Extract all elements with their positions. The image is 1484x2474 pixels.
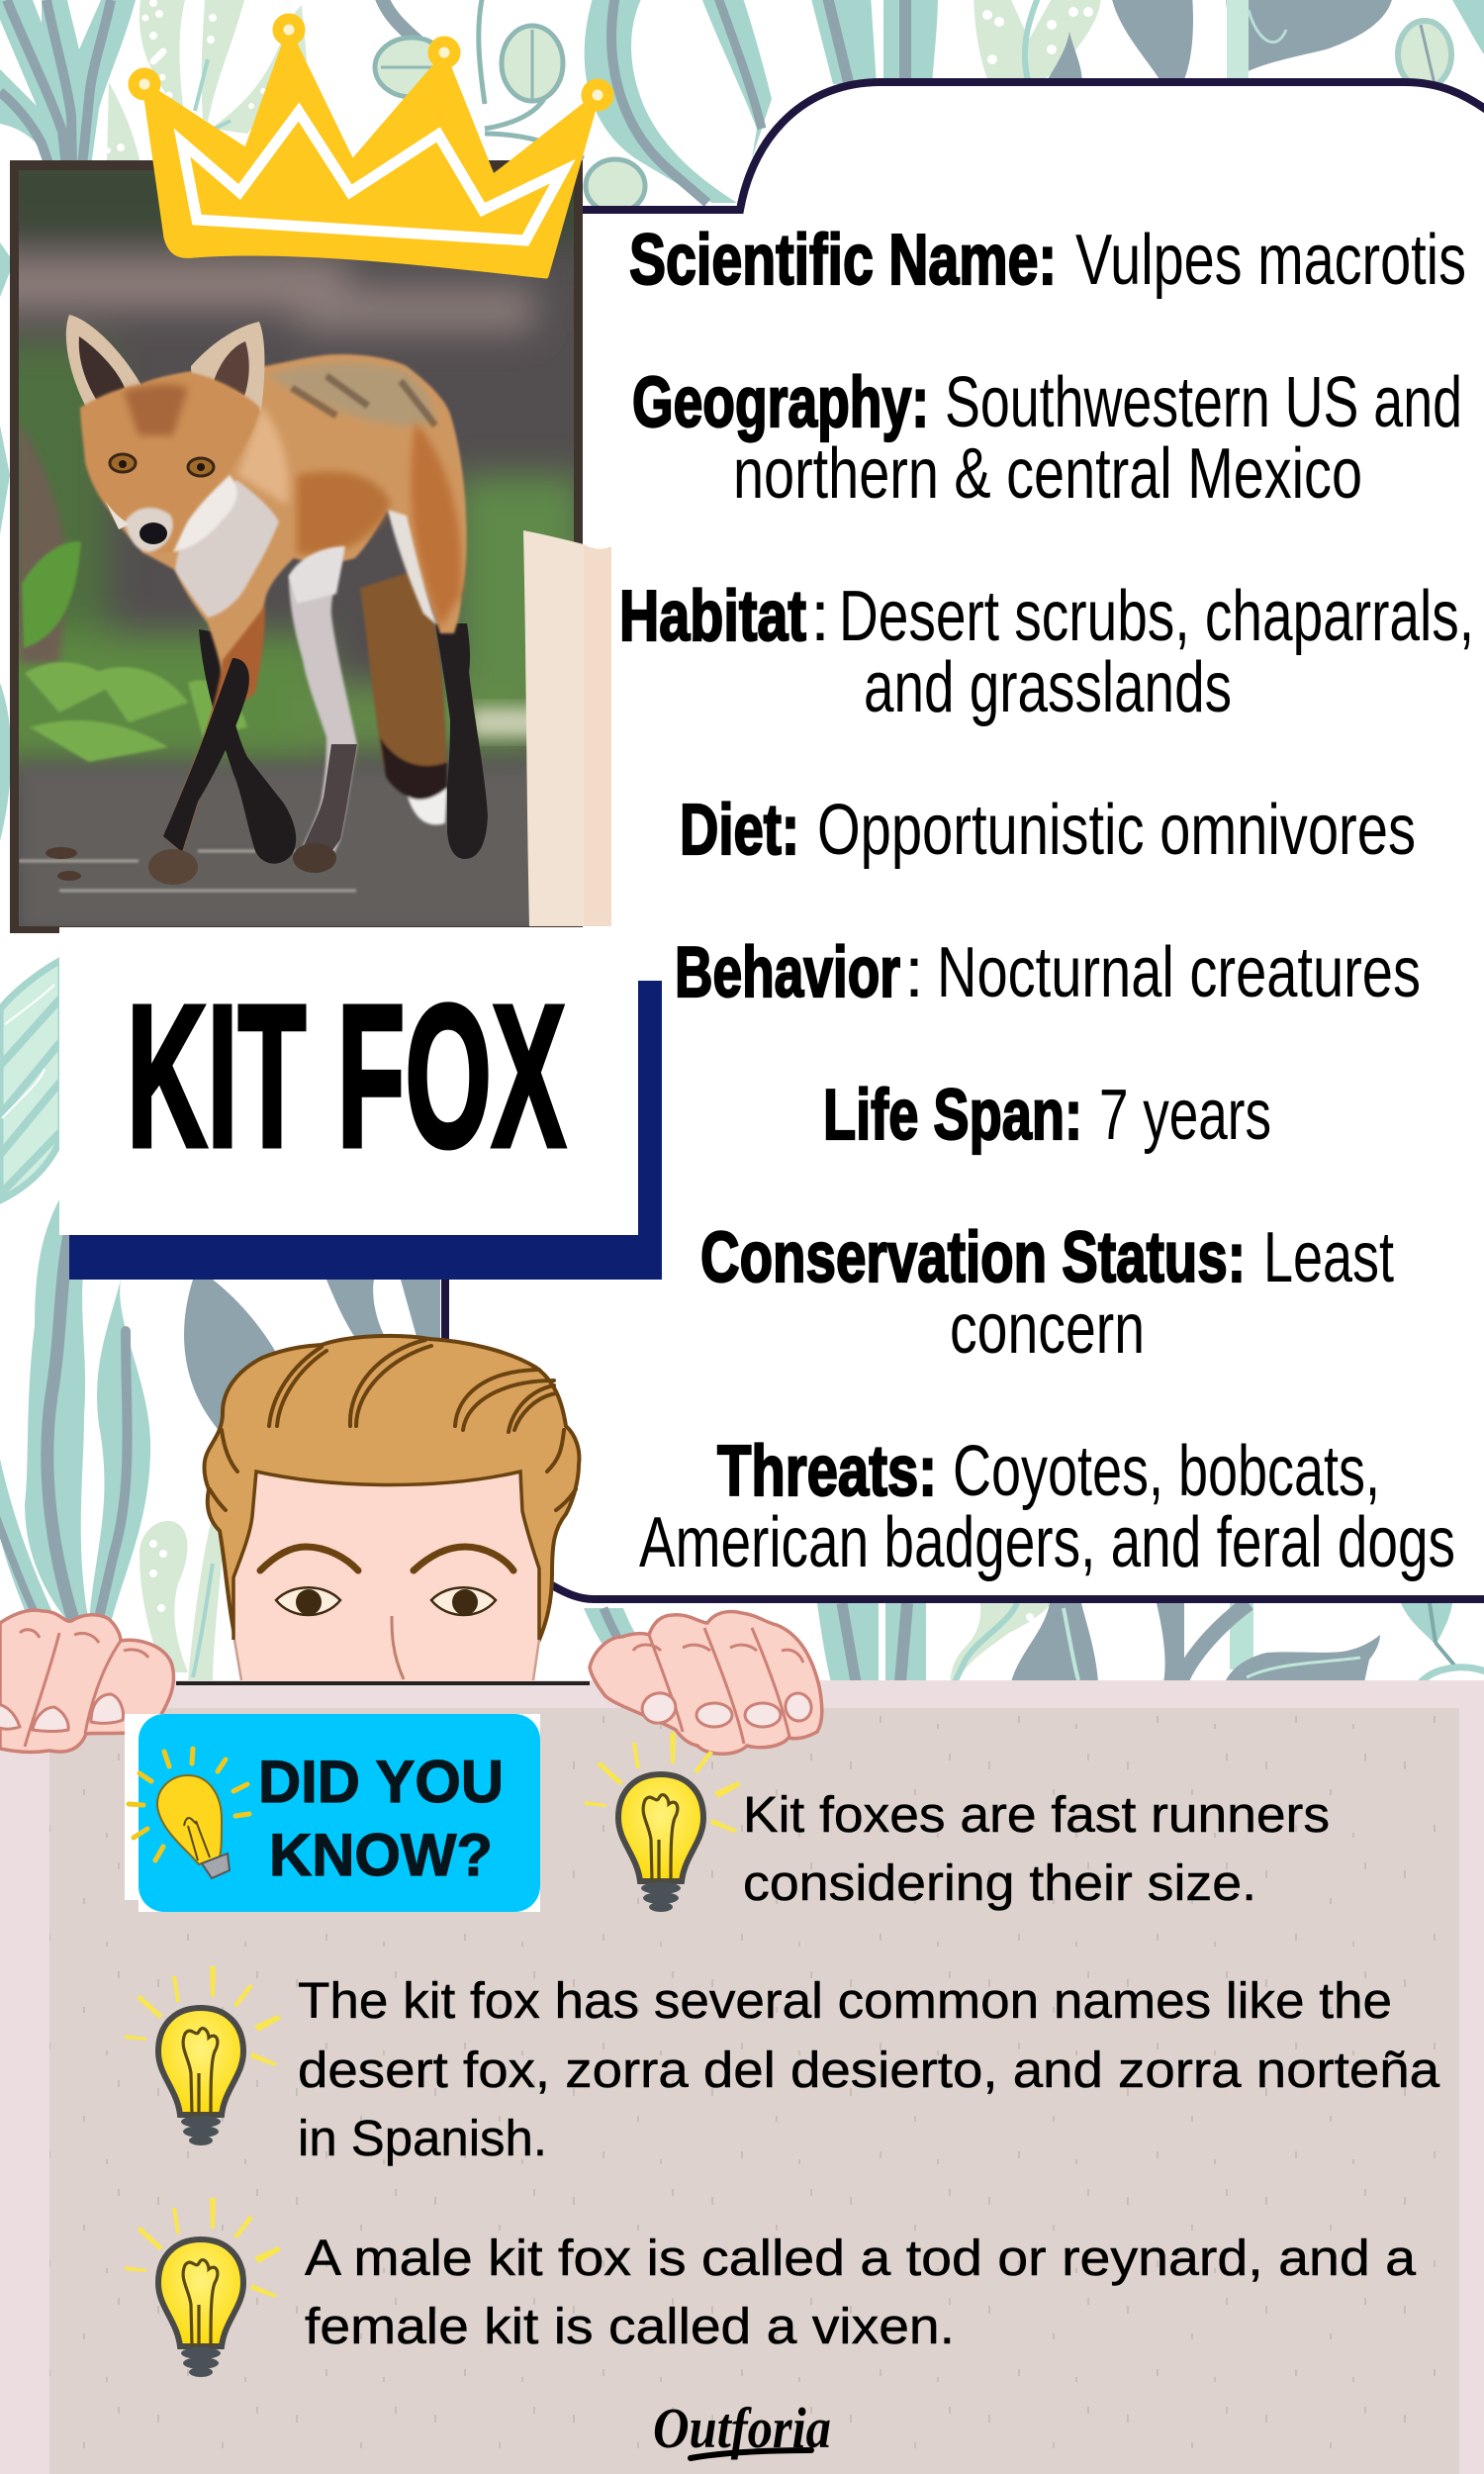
hair strands: [210, 1340, 576, 1510]
icon: bulb 1: [585, 1733, 741, 1912]
fact: habitat: and grasslands: [864, 648, 1232, 727]
far front leg: [199, 629, 296, 864]
fact: scientific name: [629, 221, 1466, 300]
title card: KIT FOX: [59, 927, 662, 1280]
fact 2 text: [298, 1972, 1440, 2166]
panel: did you know paper: [0, 1680, 1484, 2474]
fact: diet: Diet:: [680, 791, 799, 870]
fact: geography: [632, 363, 1462, 514]
fact 1 text: [743, 1786, 1330, 1911]
fact: habitat: Habitat: [619, 577, 806, 656]
back fur shading: [237, 363, 462, 628]
title: KIT FOX: [127, 963, 566, 1189]
fact 2 text: in Spanish.: [298, 2110, 547, 2166]
logo: Outforia: Outforia: [653, 2396, 831, 2460]
badge: did you know: [125, 1714, 540, 1912]
botanical background: lower left plants: [0, 1199, 440, 1682]
fact: conservation status: [700, 1218, 1394, 1369]
fact: conservation status: Least: [1263, 1218, 1394, 1297]
eyes: [276, 1587, 496, 1615]
botanical background: left margin leaf beside title: [0, 242, 61, 1200]
fact: behavior: :: [904, 933, 924, 1012]
icon: bulb 3: [125, 2198, 281, 2377]
badge text: DID YOU: [258, 1749, 504, 1815]
fact: life span: 7 years: [1099, 1076, 1271, 1155]
photo frame with fox: [0, 139, 613, 933]
fact 2 with bulb: [125, 1966, 1440, 2166]
head: [80, 372, 260, 552]
fact: conservation status: Conservation Status:: [700, 1218, 1246, 1297]
badge: did you know: KNOW?: [269, 1822, 493, 1888]
fact 2 text: desert fox, zorra del desierto, and zorra norteña: [298, 2042, 1440, 2098]
left hand: [0, 1610, 174, 1752]
fact: habitat: :: [810, 577, 830, 656]
icon: crown: [134, 19, 608, 276]
fact: life span: Life Span:: [823, 1076, 1082, 1155]
icon: bulb 2: [125, 1966, 281, 2145]
hair: [204, 1336, 579, 1640]
photo background: [19, 170, 574, 926]
white flank stripe: [388, 510, 437, 625]
fact: behavior: Behavior: [675, 933, 900, 1012]
fact: scientific name: Scientific Name:: [629, 221, 1057, 300]
fact 3 text: [305, 2230, 1417, 2354]
right hand: [590, 1611, 822, 1754]
fact 3 with bulb: [125, 2198, 1417, 2377]
fact 1 text: Kit foxes are fast runners: [743, 1786, 1330, 1843]
fingernails: [0, 1694, 123, 1732]
fact 3 text: A male kit fox is called a tod or reynard, and a: [305, 2230, 1417, 2286]
body: [142, 354, 467, 678]
nose: [392, 1616, 404, 1679]
botanical background: top strip: [0, 0, 1484, 213]
fact 1 with bulb: [585, 1733, 1330, 1912]
face: [233, 1472, 539, 1682]
fact: behavior: [675, 933, 1421, 1012]
desk line: [176, 1681, 590, 1685]
tail: [360, 570, 447, 824]
fact: geography: Geography:: [632, 363, 929, 442]
near hind leg: [435, 623, 488, 859]
belly: [289, 546, 345, 604]
ears: [65, 315, 141, 406]
mid hind leg: [289, 546, 357, 861]
fox: [66, 315, 488, 885]
character peeking over panel: [176, 1336, 590, 1683]
fact 1 text: considering their size.: [743, 1855, 1256, 1911]
icon: badge light bulb: [129, 1749, 249, 1878]
fact: habitat: [619, 577, 1474, 727]
botanical background: lower right plants: [584, 1603, 1484, 1682]
fact: threats: [639, 1432, 1455, 1582]
near front leg: [165, 606, 265, 852]
chest: [175, 480, 279, 618]
panel: species facts speech card: [445, 82, 1484, 1599]
eyebrows: [260, 1547, 513, 1570]
fact 3 text: female kit is called a vixen.: [305, 2298, 955, 2354]
fact: threats: Threats:: [717, 1432, 937, 1511]
fact 2 text: The kit fox has several common names like the: [298, 1972, 1392, 2029]
decorative tape on photo: [523, 530, 611, 926]
fact: conservation status: concern: [950, 1289, 1145, 1369]
fingernails: [639, 1689, 814, 1727]
